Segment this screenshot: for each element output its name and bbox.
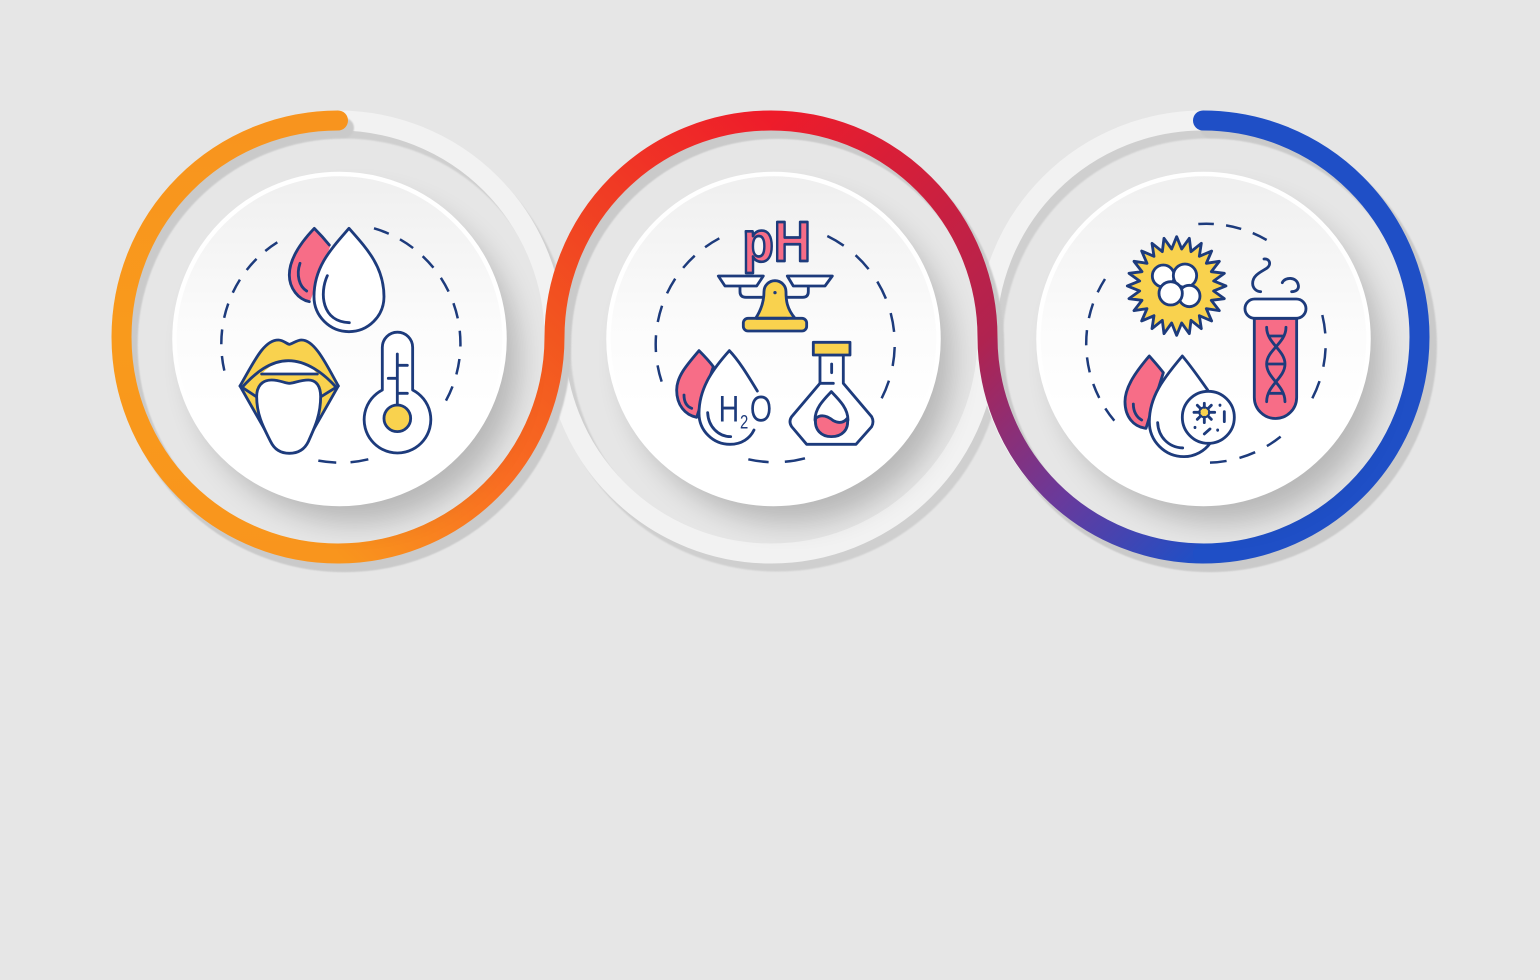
ribbon shadow xyxy=(127,128,1427,562)
dashed circle xyxy=(221,228,460,463)
icon: water drop with H2O: 2 xyxy=(740,410,748,433)
icon: flask xyxy=(790,342,873,444)
disk: middle xyxy=(608,174,953,523)
pH label: pH xyxy=(742,211,811,274)
icon: pink drop xyxy=(289,228,331,302)
icon: pink drop xyxy=(1125,356,1163,428)
gradient ribbon connecting the three circles xyxy=(121,120,1419,554)
icon: pink drop xyxy=(677,351,713,417)
icon: thermometer xyxy=(364,332,431,453)
disk: left xyxy=(174,174,519,523)
icon: water drop with H2O xyxy=(699,351,772,444)
icon: spiky microbe xyxy=(1127,237,1226,335)
icon: water drop with H2O: O xyxy=(750,388,772,429)
icon: lips and tongue xyxy=(240,340,338,453)
icon: white drop with magnifier xyxy=(1149,356,1234,457)
icon: balance scale xyxy=(718,276,832,331)
icon: water drop with H2O: H xyxy=(719,388,739,429)
icon: test tube with DNA xyxy=(1245,259,1306,418)
icon group: pH scale, H2O drop and flask xyxy=(656,211,895,462)
dashed circle xyxy=(656,236,895,462)
dashed circle xyxy=(1086,224,1326,463)
light rings with shadows xyxy=(122,120,1426,562)
icon group: microbe, test tube and contaminated drop xyxy=(1086,224,1326,463)
icon group: drops, tongue and thermometer xyxy=(221,228,460,463)
icon: white drop xyxy=(314,228,384,332)
disk: right xyxy=(1038,174,1383,523)
